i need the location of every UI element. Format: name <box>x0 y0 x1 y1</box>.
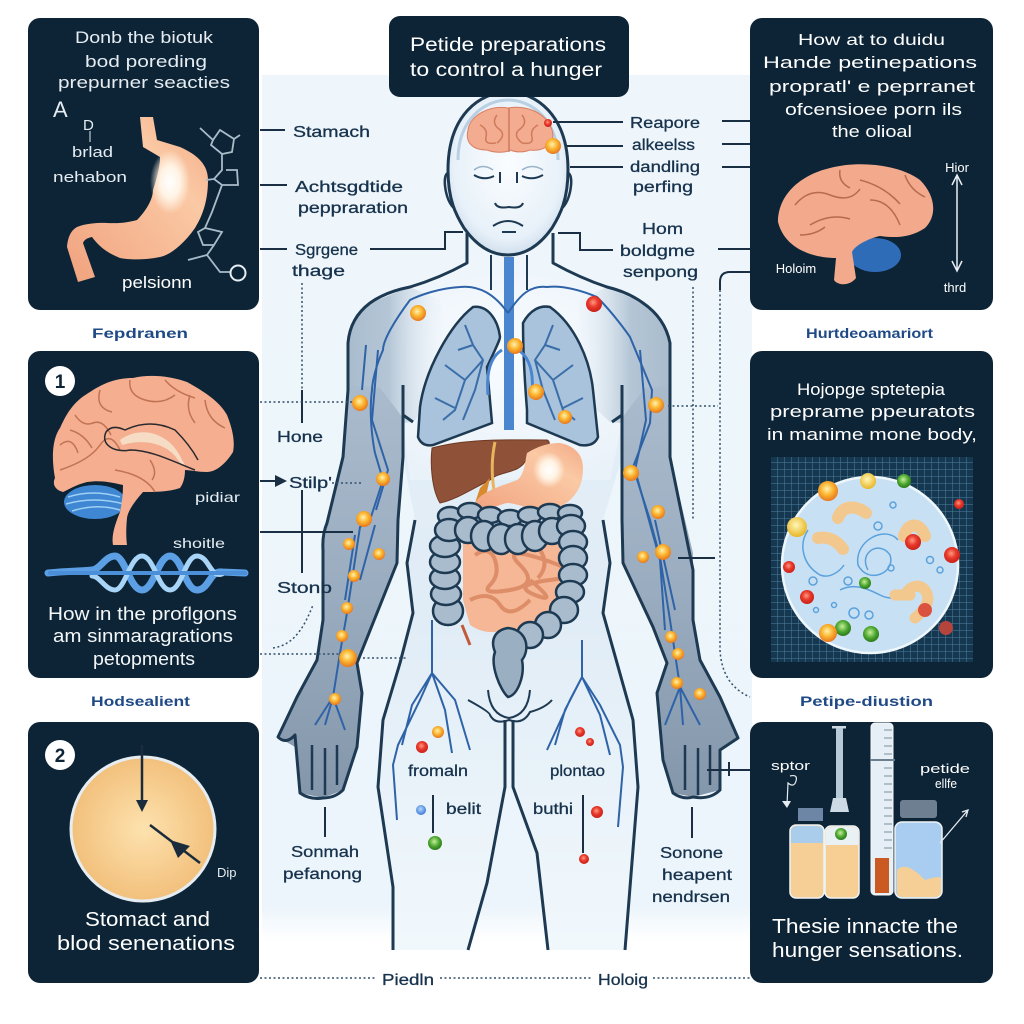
body labels <box>277 115 733 989</box>
chest <box>348 263 670 480</box>
panel captions: Petipe-diustion <box>800 693 933 709</box>
body labels: Sgrgene <box>295 242 358 259</box>
panel: petri right: preprame ppeuratots <box>770 402 975 421</box>
head <box>448 92 568 255</box>
body labels: nendrsen <box>652 889 730 906</box>
panel: stomach top-left: nehabon <box>53 169 127 186</box>
panel: brain top-right: thrd <box>944 280 966 295</box>
panel: brain top-right <box>750 18 993 310</box>
body labels: Stamach <box>293 124 370 141</box>
icon: left vial <box>790 808 824 898</box>
brain in head <box>467 107 561 154</box>
eyes nose mouth <box>474 172 543 232</box>
peptide dots <box>329 296 706 864</box>
panel: stomach top-left: D <box>83 117 94 134</box>
left shoulder shading <box>348 287 450 423</box>
body labels: Stilp' <box>289 475 332 492</box>
panel: brain left <box>28 351 259 678</box>
icon: measuring tube <box>870 723 895 895</box>
icon: right vial <box>895 800 942 898</box>
body figure <box>278 92 738 950</box>
icon: brain <box>53 376 234 545</box>
panel: stomach top-left <box>28 18 259 310</box>
icon: cerebellum <box>64 485 126 519</box>
body labels: Hone <box>277 429 323 446</box>
body labels: Reapore <box>630 115 700 132</box>
body labels: Sonmah <box>291 844 359 861</box>
body labels: senpong <box>623 264 698 281</box>
body labels: buthi <box>533 801 573 818</box>
panel: brain left: 1 <box>55 372 66 393</box>
panel: petri right: in manime mone body, <box>767 425 977 444</box>
panel: brain left: am sinmaragrations <box>53 626 233 646</box>
title: to control a hunger <box>410 60 603 81</box>
right shoulder shading <box>570 287 670 423</box>
panel: stomach top-left: pelsionn <box>122 273 192 292</box>
panel: stomach top-left: bod poreding <box>85 52 207 71</box>
icon: brain <box>849 238 901 272</box>
arrow: petide label <box>940 810 968 843</box>
body outline <box>278 233 738 950</box>
intestines <box>430 503 587 697</box>
panel: vials bottom-right: ellfe <box>935 776 957 791</box>
panel: brain left: How in the proflgons <box>48 604 237 624</box>
panel: vials bottom-right: sptor <box>771 758 811 773</box>
title <box>389 16 629 97</box>
body labels: dandling <box>630 159 700 176</box>
panel: brain top-right: How at to duidu <box>798 32 945 49</box>
body labels: pefanong <box>283 866 362 883</box>
brain corpus band <box>120 432 185 466</box>
nerves <box>315 287 700 827</box>
panel: vials bottom-right: hunger sensations. <box>772 940 963 962</box>
panel: stomach disc bottom-left <box>28 722 259 983</box>
icon: molecule <box>188 128 240 272</box>
body labels: peppraration <box>298 200 408 217</box>
body labels: perfing <box>633 179 693 196</box>
panel: vials bottom-right <box>750 722 993 983</box>
body labels: Hom <box>642 221 683 238</box>
grid background <box>771 457 973 662</box>
panel: brain top-right: Holoim <box>776 261 816 276</box>
panel: stomach top-left: A <box>53 97 68 122</box>
body labels: belit <box>446 801 482 818</box>
panel: brain top-right: Hior <box>945 160 970 175</box>
panel: brain left: petopments <box>93 649 195 669</box>
legs and torso <box>378 263 638 950</box>
liver and stomach <box>431 440 583 513</box>
body labels: Holoig <box>598 972 648 989</box>
panel: stomach disc bottom-left: blod senenations <box>57 933 235 955</box>
head inner line <box>458 100 558 160</box>
panel: vials bottom-right: Thesie innacte the <box>772 916 958 938</box>
panel captions: Hurtdeoamariort <box>806 325 933 341</box>
panel captions <box>91 325 933 709</box>
face features <box>474 166 543 170</box>
panel: brain top-right: the olioal <box>832 122 912 141</box>
panel: brain left: pidiar <box>195 489 240 505</box>
ears <box>445 172 571 212</box>
panel: stomach top-left: prepurner seacties <box>58 73 230 92</box>
body labels: heapent <box>662 867 733 884</box>
icon: signal wave <box>48 556 245 590</box>
panel captions: Hodsealient <box>91 693 190 709</box>
body labels: alkeelss <box>632 137 695 154</box>
finger lines <box>312 745 710 795</box>
icon: syringe needle <box>830 726 849 812</box>
panel: stomach disc bottom-left: Stomact and <box>85 909 210 931</box>
body labels: Achtsgdtide <box>295 179 403 196</box>
body labels: plontao <box>550 763 605 780</box>
panel: vials bottom-right: petide <box>920 761 970 776</box>
panel: stomach top-left: Donb the biotuk <box>75 28 214 47</box>
body labels: thage <box>292 263 345 280</box>
panel: brain left: shoitle <box>173 535 225 551</box>
panel: brain top-right: propratl' e peprranet <box>769 77 975 96</box>
petri dish <box>782 477 958 653</box>
left arm <box>278 385 403 798</box>
panel: brain top-right: ofcensioee porn ils <box>785 100 962 119</box>
icon: middle vial <box>825 826 859 898</box>
body labels: Piedln <box>382 972 434 989</box>
body labels: Stonb <box>277 580 332 597</box>
panel: stomach disc bottom-left: Dip <box>217 865 237 880</box>
right arm <box>622 385 738 797</box>
connector lines <box>260 121 750 978</box>
title: Petide preparations <box>410 35 606 56</box>
lungs <box>418 257 598 445</box>
neck lines <box>491 255 527 290</box>
body labels: Sonone <box>660 845 723 862</box>
panel: brain top-right: Hande petinepations <box>763 53 977 72</box>
panel captions: Fepdranen <box>92 325 188 341</box>
body labels: fromaln <box>408 763 468 780</box>
panel: petri right: Hojopge sptetepia <box>797 380 946 399</box>
groin <box>468 690 552 722</box>
panel: petri right <box>750 351 993 678</box>
peptide beans <box>818 508 928 618</box>
panel: stomach top-left: brlad <box>72 144 113 161</box>
body labels: boldgme <box>620 243 695 260</box>
icon: stomach <box>67 117 208 282</box>
panel: stomach disc bottom-left: 2 <box>55 746 65 767</box>
